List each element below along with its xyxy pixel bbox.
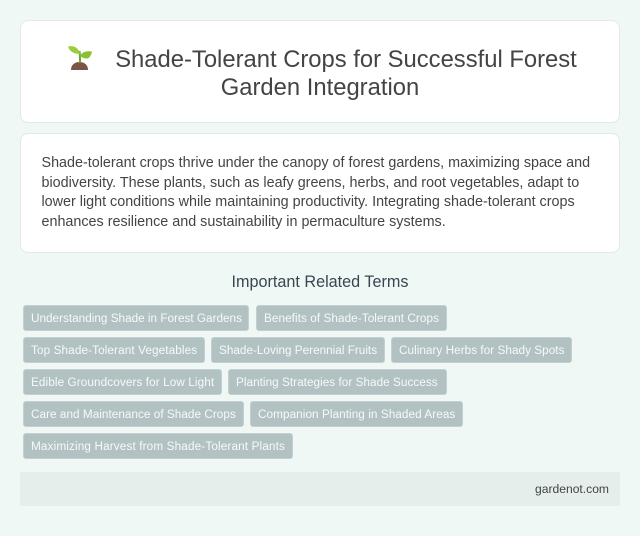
tag: Culinary Herbs for Shady Spots: [399, 344, 564, 357]
description text: [42, 155, 590, 230]
tag: Edible Groundcovers for Low Light: [31, 376, 214, 389]
panel: description: [20, 133, 620, 253]
description text: biodiversity. These plants, such as leafy greens, herbs, and root vegetables, adapt to: [42, 175, 579, 191]
tag: Planting Strategies for Shade Success: [236, 376, 438, 389]
title: [115, 46, 577, 101]
heading: related terms: Important Related Terms: [232, 273, 408, 291]
tag: [23, 369, 222, 395]
tag list: [23, 305, 572, 459]
footer bar: gardenot.com: [535, 482, 609, 496]
tag: [23, 337, 205, 363]
tag: [211, 337, 385, 363]
icon: seedling: [68, 46, 92, 70]
tag: [23, 433, 293, 459]
tag: Companion Planting in Shaded Areas: [258, 408, 455, 421]
panel: header card: [20, 20, 620, 123]
footer bar: [20, 472, 620, 506]
tag: [250, 401, 463, 427]
tag: [391, 337, 572, 363]
title: Shade-Tolerant Crops for Successful Forest: [115, 46, 577, 73]
tag: [228, 369, 447, 395]
tag: [23, 401, 244, 427]
tag: Top Shade-Tolerant Vegetables: [31, 344, 197, 357]
tag: Shade-Loving Perennial Fruits: [219, 344, 377, 357]
tag: [23, 305, 249, 331]
tag: Maximizing Harvest from Shade-Tolerant Plants: [31, 440, 285, 453]
description text: enhances resilience and sustainability in permaculture systems.: [42, 214, 446, 230]
tag: [256, 305, 447, 331]
tag: Benefits of Shade-Tolerant Crops: [264, 312, 439, 325]
tag: Understanding Shade in Forest Gardens: [31, 312, 242, 325]
tag: Care and Maintenance of Shade Crops: [31, 408, 236, 421]
description text: Shade-tolerant crops thrive under the canopy of forest gardens, maximizing space and: [42, 155, 590, 171]
description text: lower light conditions while maintaining productivity. Integrating shade-tolerant crops: [42, 194, 575, 210]
title: Garden Integration: [221, 74, 419, 101]
